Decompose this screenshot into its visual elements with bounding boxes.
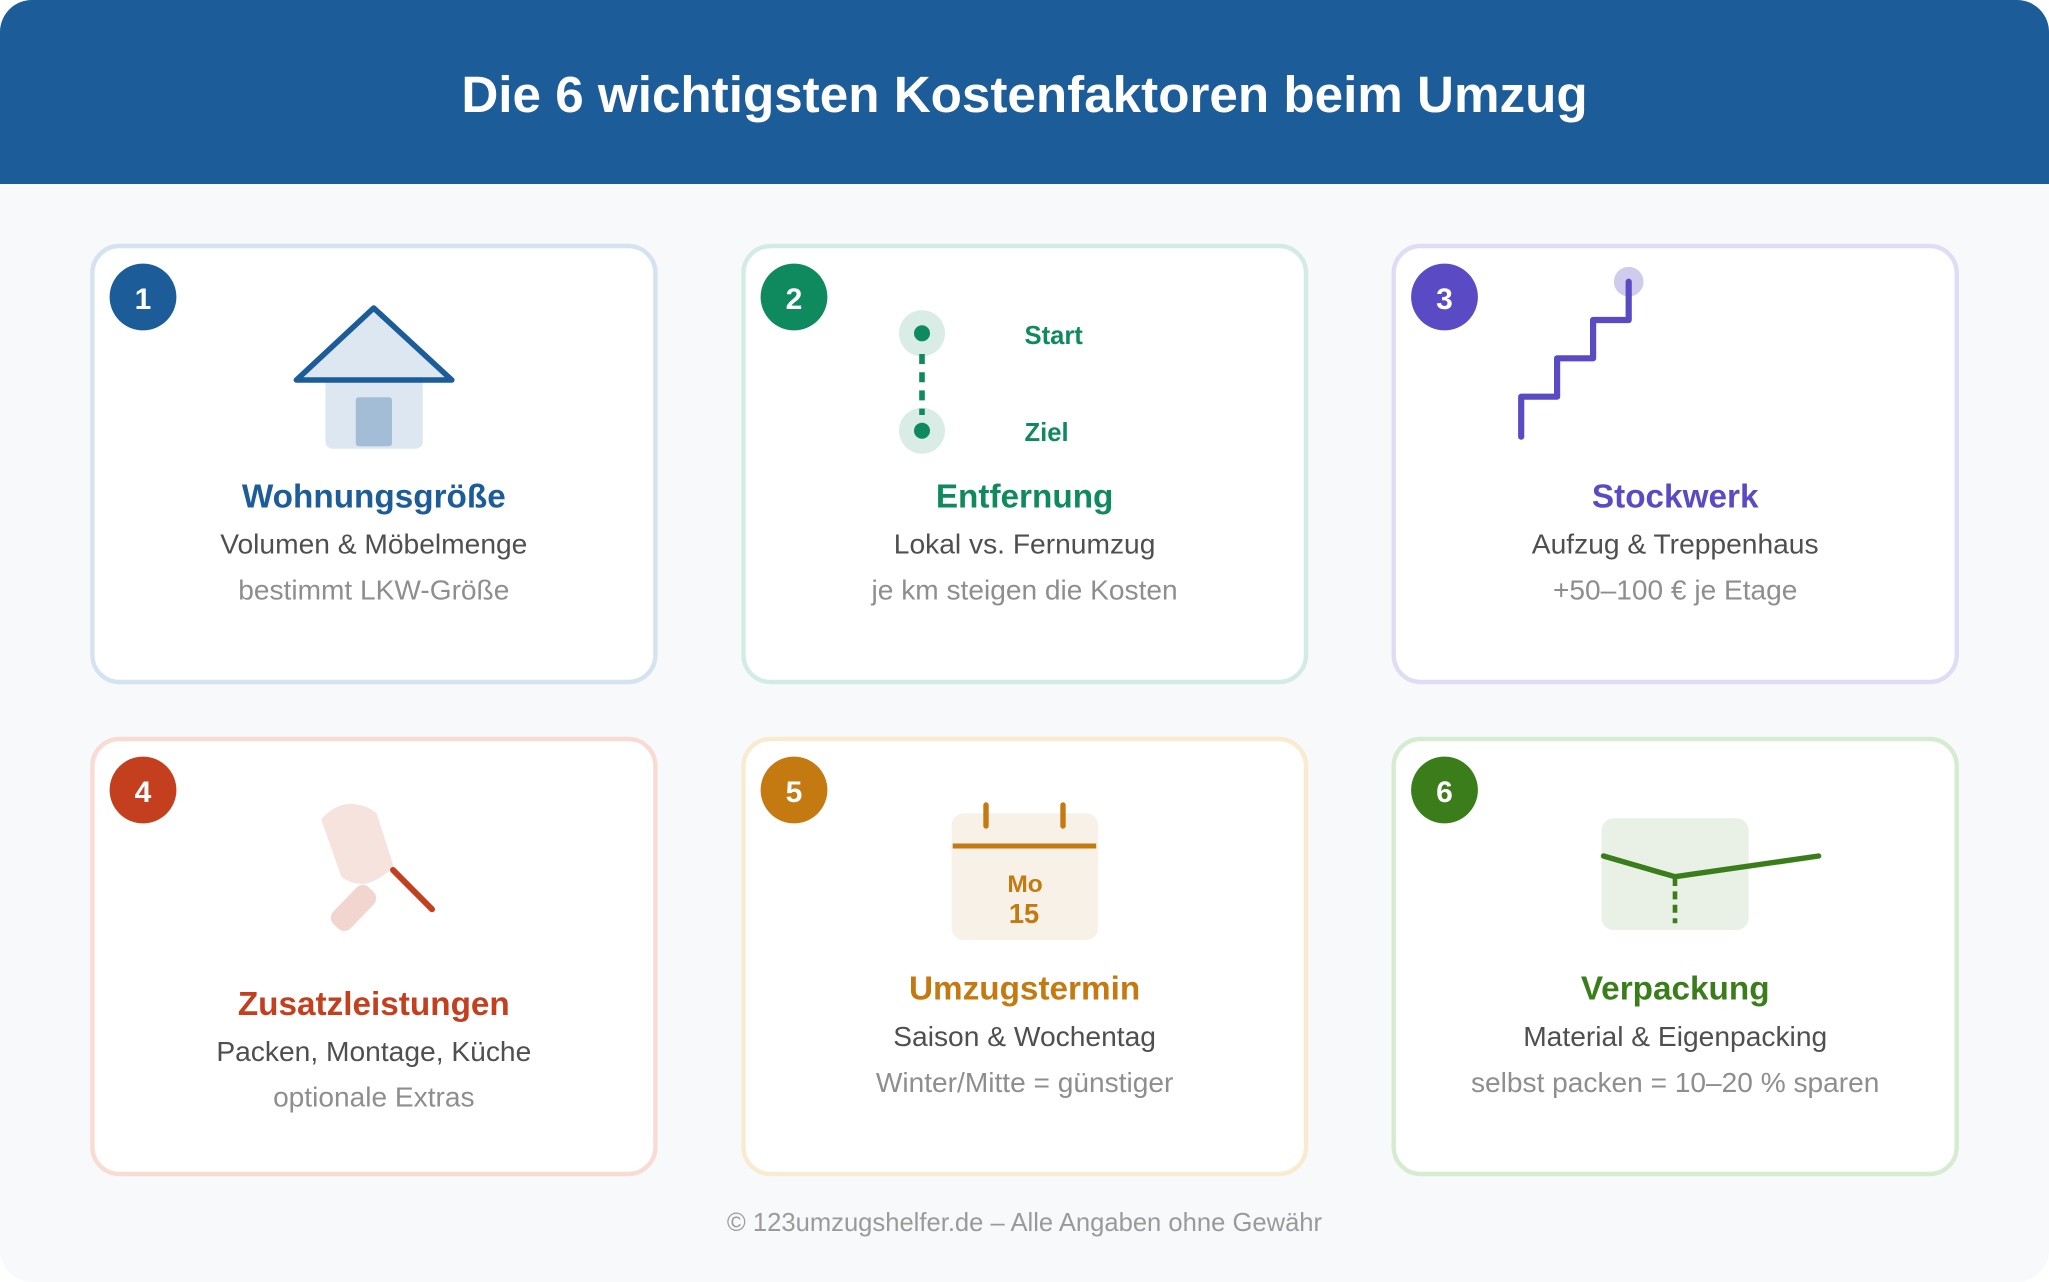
note: bestimmt LKW-Größe (238, 574, 509, 606)
panel: Stockwerk (1394, 246, 1957, 682)
badge 5 (761, 757, 827, 823)
badge 6 (1411, 757, 1478, 823)
note: optionale Extras (273, 1082, 475, 1112)
panel: Wohnungsgröße (92, 246, 655, 682)
note: selbst packen = 10–20 % sparen (1471, 1067, 1879, 1098)
heading: Zusatzleistungen (238, 986, 510, 1023)
title: Die 6 wichtigsten Kostenfaktoren beim Umzug (461, 66, 1588, 123)
icon: tool (321, 804, 432, 935)
badge 4 (110, 757, 176, 823)
badge 1 (110, 264, 176, 330)
badge 3: 3 (1436, 283, 1453, 316)
icon: calendar: 15 (1009, 898, 1039, 929)
icon: route: Start (1024, 322, 1083, 350)
panel: Verpackung (1394, 739, 1957, 1174)
icon: house (296, 308, 452, 449)
badge 2: 2 (786, 283, 802, 316)
badge 3 (1411, 264, 1478, 330)
description: Packen, Montage, Küche (216, 1035, 531, 1067)
heading: Verpackung (1581, 970, 1770, 1008)
panel: Zusatzleistungen (92, 739, 655, 1174)
heading: Wohnungsgröße (242, 478, 506, 516)
panel: Entfernung (744, 246, 1306, 682)
description: Volumen & Möbelmenge (220, 528, 527, 560)
badge 1: 1 (135, 283, 151, 316)
badge 5: 5 (786, 776, 802, 809)
heading: Entfernung (936, 478, 1113, 516)
badge 4: 4 (135, 776, 152, 809)
badge 2 (761, 264, 827, 330)
heading: Umzugstermin (909, 970, 1140, 1008)
note: je km steigen die Kosten (871, 574, 1178, 606)
icon: stairs (1521, 267, 1643, 437)
badge 6: 6 (1436, 776, 1453, 809)
description: Aufzug & Treppenhaus (1532, 528, 1819, 560)
description: Material & Eigenpacking (1523, 1020, 1827, 1052)
icon: box (1602, 818, 1819, 930)
footer: © 123umzugshelfer.de – Alle Angaben ohne Gewähr (727, 1209, 1323, 1237)
icon: calendar: Mo (1007, 871, 1043, 898)
panel: Umzugstermin (744, 739, 1306, 1174)
description: Saison & Wochentag (893, 1020, 1156, 1052)
heading: Stockwerk (1592, 478, 1759, 516)
header band (0, 0, 2049, 184)
icon: calendar (952, 805, 1098, 940)
icon: route: Ziel (1024, 419, 1069, 447)
note: Winter/Mitte = günstiger (876, 1067, 1173, 1098)
icon: route (899, 310, 1083, 454)
note: +50–100 € je Etage (1553, 574, 1797, 606)
description: Lokal vs. Fernumzug (894, 528, 1155, 560)
